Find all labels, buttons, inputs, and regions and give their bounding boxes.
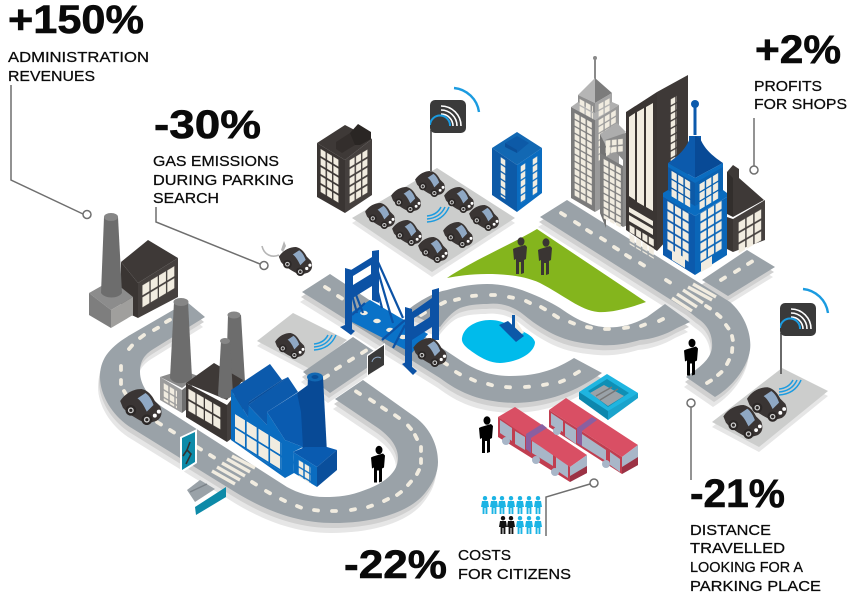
bus: front	[498, 407, 587, 482]
stairs: teal metro entrance	[579, 374, 638, 420]
building: small blue	[492, 132, 542, 212]
stat: -21% distance travelled: DISTANCE	[690, 522, 771, 539]
bus: rear	[549, 398, 638, 474]
callout line: profits	[750, 118, 758, 174]
people: park	[513, 237, 552, 275]
skyline: tall dark tower	[626, 75, 688, 259]
stat: +2% profits for shops: PROFITS	[754, 78, 822, 95]
stairs: left metro entrance	[187, 480, 226, 515]
stat: -30% gas emissions: -30%	[154, 103, 261, 147]
skyline: gray tower	[571, 56, 619, 212]
road network	[98, 200, 775, 533]
stat: +2% profits for shops: +2%	[755, 28, 841, 72]
stat: -22% costs for citizens: COSTS	[458, 547, 511, 564]
factory: gray block with chimney	[160, 298, 198, 413]
stat: -22% costs for citizens	[344, 543, 571, 587]
skyline: blue tower	[663, 100, 727, 275]
bridge	[340, 250, 439, 375]
skyline: small dark gable	[727, 165, 765, 255]
road sign: teal pedestrian	[180, 429, 197, 474]
stat: +150% administration revenues	[8, 0, 149, 85]
car: small lot	[275, 333, 305, 359]
stat: -21% distance travelled: PARKING PLACE	[690, 578, 821, 595]
factory: far left with chimney	[89, 213, 178, 328]
wifi: right lot	[779, 380, 801, 395]
stat: -21% distance travelled	[690, 472, 821, 595]
parking sign: right	[780, 289, 828, 374]
crowd of citizens	[481, 496, 542, 534]
person: right road	[684, 339, 698, 376]
car: emitting exhaust	[262, 241, 312, 276]
stat: +150% administration revenues: REVENUES	[8, 68, 95, 85]
wifi: central lot	[427, 207, 449, 222]
car: bridge	[413, 338, 447, 367]
crosswalk: left	[212, 456, 255, 484]
stat: -21% distance travelled: -21%	[690, 472, 785, 516]
callout line: administration revenues	[11, 85, 91, 218]
road sign: dark	[367, 343, 385, 376]
pond with boat	[462, 315, 535, 363]
person: inside left loop	[371, 446, 385, 482]
stat: -21% distance travelled: LOOKING FOR A	[690, 559, 803, 576]
stat: +2% profits for shops: FOR SHOPS	[754, 96, 847, 113]
stat: -30% gas emissions: SEARCH	[153, 190, 219, 207]
stat: -21% distance travelled: TRAVELLED	[690, 540, 785, 557]
stat: +2% profits for shops	[754, 28, 847, 113]
stat: -30% gas emissions: DURING PARKING	[153, 172, 294, 189]
stat: -22% costs for citizens: -22%	[344, 543, 447, 587]
factory: dark with two chimneys	[186, 312, 245, 442]
callout line: gas emissions	[156, 207, 268, 270]
skyline: small gray tower	[600, 123, 628, 228]
park: green lawn	[447, 229, 646, 312]
stat: -30% gas emissions: GAS EMISSIONS	[153, 153, 279, 170]
stat: +150% administration revenues: ADMINISTRATION	[8, 49, 149, 66]
person: near bus	[479, 416, 493, 453]
building: dark office	[317, 124, 372, 213]
factory: blue sawtooth	[231, 364, 337, 487]
wifi: small lot	[314, 335, 336, 350]
cars: central parking lot	[365, 171, 499, 263]
parking lot: central	[352, 168, 515, 277]
car: left road	[120, 389, 162, 425]
cars: right parking lot	[723, 387, 787, 439]
parking sign: central	[430, 88, 479, 172]
parking lot: right	[712, 368, 828, 452]
callout line: distance	[687, 399, 695, 480]
stat: -30% gas emissions	[153, 103, 294, 207]
crosswalk: right	[672, 284, 716, 311]
parking lot: small left	[257, 313, 347, 374]
callout line: costs	[546, 479, 598, 536]
stat: -22% costs for citizens: FOR CITIZENS	[458, 566, 571, 583]
